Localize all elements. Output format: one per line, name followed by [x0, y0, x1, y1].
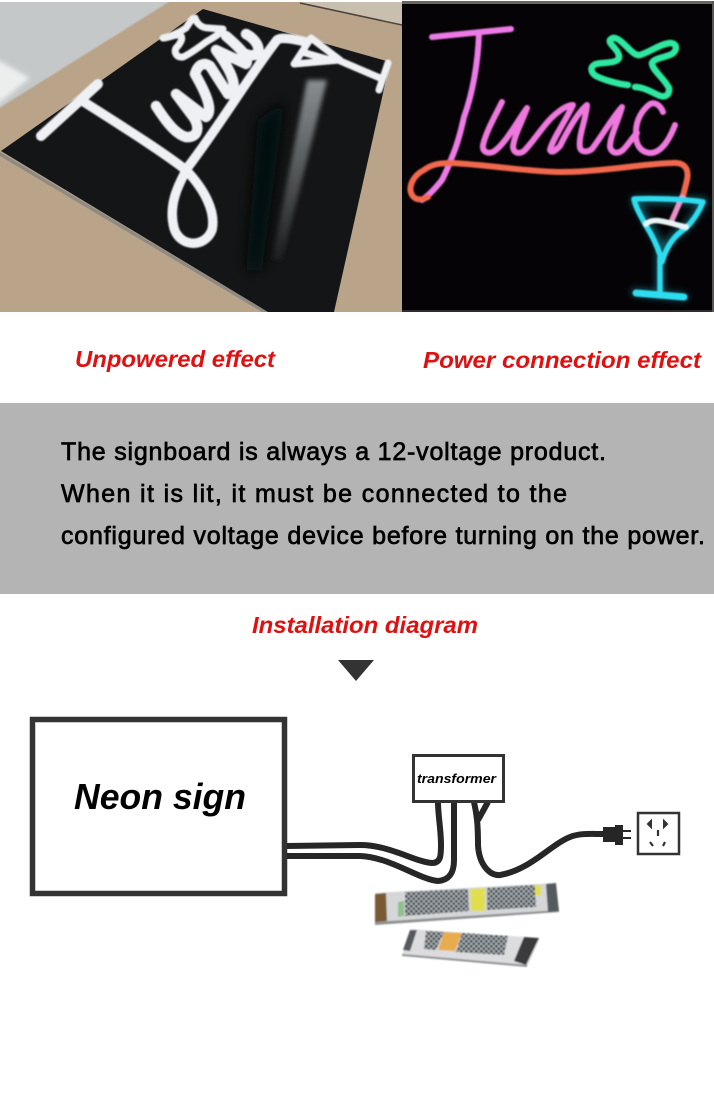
star: [163, 18, 223, 57]
cables: [287, 802, 604, 881]
caption: power connection effect: Power connection effect: [423, 347, 702, 373]
cocktail glass: [634, 199, 703, 262]
icon: plug: [603, 825, 631, 845]
letters: [156, 34, 258, 137]
pink drip into glass: [672, 197, 682, 220]
icon: wall socket: [638, 813, 679, 854]
T bar: [41, 84, 98, 136]
notice text: When it is lit, it must be connected to the: [61, 480, 567, 508]
T stem and loop: [84, 38, 306, 243]
cocktail glass: [294, 38, 388, 90]
notice text: [61, 438, 705, 550]
panel: voltage notice: [0, 403, 714, 594]
power supply: small: [402, 929, 540, 967]
arrow: pointing down: [338, 660, 374, 681]
photo: powered neon sign: [402, 1, 714, 312]
caption: unpowered effect: Unpowered effect: [75, 346, 276, 372]
power supply: large: [375, 883, 559, 925]
photo: unpowered neon sign: [0, 0, 402, 312]
notice text: The signboard is always a 12-voltage product.: [61, 438, 606, 466]
letters unic: [483, 102, 637, 153]
transformer box: [414, 756, 504, 802]
glow layer: [634, 200, 704, 297]
notice text: configured voltage device before turning on the power.: [61, 522, 705, 550]
glass stem and foot: [657, 258, 663, 292]
letter J: [422, 29, 511, 200]
green star: [592, 38, 676, 96]
orange underline: [410, 163, 688, 199]
transformer box: transformer: [417, 771, 497, 786]
heading: installation diagram: Installation diagram: [252, 612, 478, 638]
neon sign box: Neon sign: [74, 776, 246, 817]
neon sign box: [32, 720, 284, 894]
